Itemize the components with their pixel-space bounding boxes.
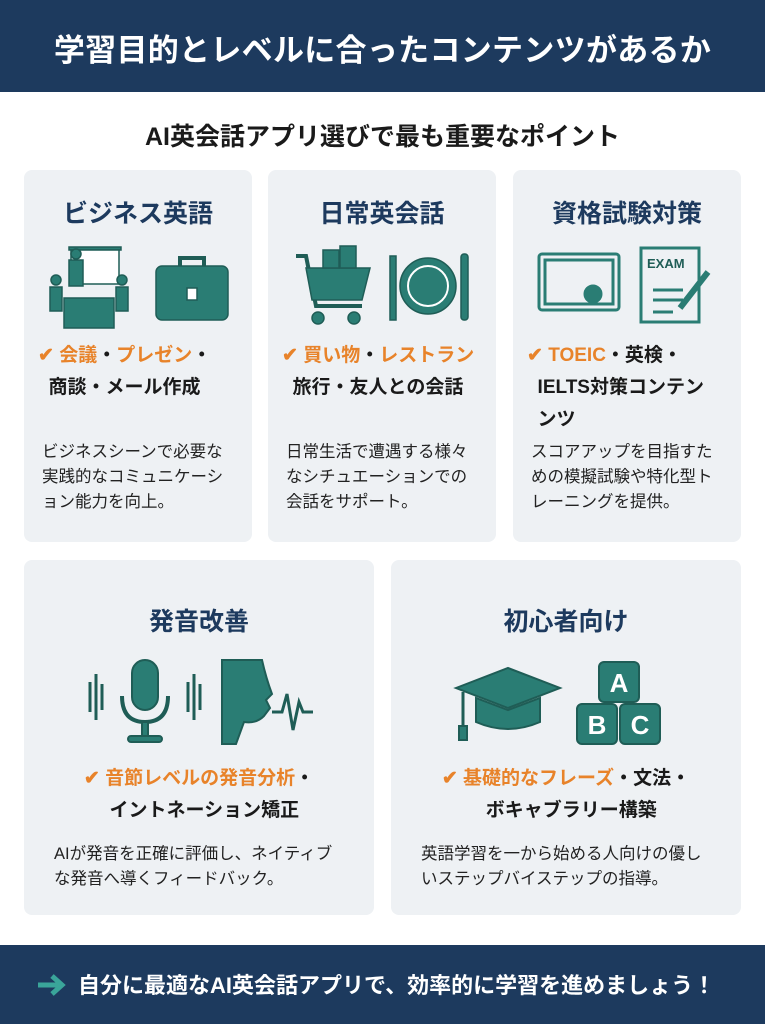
description: 日常生活で遭遇する様々なシチュエーションでの会話をサポート。	[286, 443, 468, 511]
highlight	[84, 768, 314, 821]
icons: graduation cap and ABC blocks: A	[610, 668, 629, 698]
highlight: ✔ 会議・プレゼン・	[38, 345, 211, 366]
title: 学習目的とレベルに合ったコンテンツがあるか	[54, 33, 711, 68]
description: ビジネスシーンで必要な実践的なコミュニケーション能力を向上。	[42, 443, 223, 511]
heading: 日常英会話	[319, 200, 444, 228]
icons: graduation cap and ABC blocks: C	[631, 710, 650, 740]
highlight: ✔ 音節レベルの発音分析・	[84, 768, 314, 789]
highlight: 商談・メール作成	[49, 377, 201, 398]
heading: 発音改善	[149, 608, 249, 636]
icons: cart and plate	[296, 245, 469, 325]
heading: 資格試験対策	[552, 200, 702, 228]
icons: graduation cap and ABC blocks: B	[588, 710, 606, 740]
highlight: ✔ 基礎的なフレーズ・文法・	[442, 768, 690, 789]
icon: arrow	[38, 974, 66, 996]
highlight	[282, 344, 474, 398]
subtitle: AI英会話アプリ選びで最も重要なポイント	[145, 123, 620, 151]
panel: pronunciation	[24, 560, 374, 915]
description: スコアアップを目指すための模擬試験や特化型トレーニングを提供。	[531, 443, 712, 511]
icons: certificate and exam	[538, 246, 710, 324]
description: 英語学習を一から始める人向けの優しいステップバイステップの指導。	[421, 845, 702, 888]
highlight: IELTS対策コンテン	[538, 377, 704, 398]
highlight: ✔ TOEIC・英検・	[527, 345, 682, 366]
highlight	[442, 768, 690, 821]
heading: ビジネス英語	[63, 200, 213, 228]
icons: certificate and exam: EXAM	[647, 256, 685, 271]
icons: meeting and briefcase	[49, 246, 229, 329]
icons: graduation cap and ABC blocks	[453, 661, 661, 745]
heading: 初心者向け	[503, 608, 628, 636]
icons: microphone and speaking face	[88, 659, 313, 745]
panel: daily conversation	[268, 170, 496, 542]
panel: exam prep	[513, 170, 741, 542]
footer text: 自分に最適なAI英会話アプリで、効率的に学習を進めましょう！	[78, 973, 715, 998]
description: AIが発音を正確に評価し、ネイティブな発音へ導くフィードバック。	[54, 845, 332, 888]
highlight	[527, 344, 704, 430]
panel: business english	[24, 170, 252, 542]
highlight: イントネーション矯正	[109, 800, 299, 821]
highlight: ボキャブラリー構築	[486, 800, 657, 821]
highlight: 旅行・友人との会話	[293, 377, 463, 398]
highlight: ✔ 買い物・レストラン	[282, 345, 474, 366]
highlight: ンツ	[538, 409, 576, 430]
panel: beginners	[391, 560, 741, 915]
header banner	[0, 0, 765, 92]
highlight	[38, 344, 211, 398]
footer banner	[0, 945, 765, 1024]
